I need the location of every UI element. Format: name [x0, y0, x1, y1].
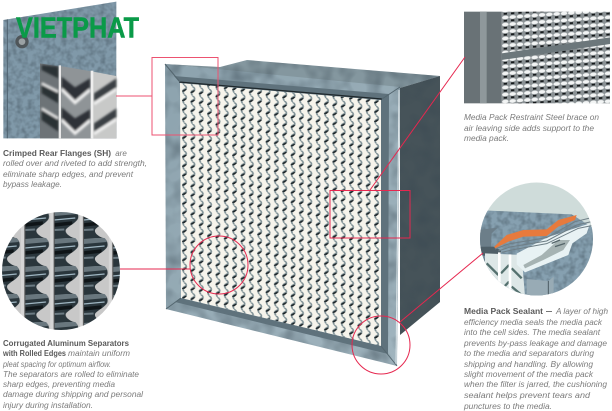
filter front frame: [165, 64, 400, 366]
filter illustration: [164, 60, 440, 366]
caption: corrugated aluminum separators: [2, 339, 143, 410]
caption: crimped rear flanges: [3, 149, 147, 189]
caption: media pack restraint: [464, 113, 600, 143]
caption: crimped rear flanges: are: [113, 149, 127, 158]
photo: crimped rear flanges: [3, 2, 116, 138]
lower bracket: [527, 277, 554, 297]
caption: media pack restraint: air leaving side adds support to the: [464, 124, 595, 133]
caption: media pack sealant: into the cell sides. The media sealant: [464, 328, 601, 337]
corrugated media detail: [40, 63, 116, 138]
circle background: [478, 180, 596, 298]
caption: corrugated aluminum separators: The separators are rolled to eliminate: [3, 370, 140, 379]
caption: crimped rear flanges: Crimped Rear Flanges (SH): [3, 149, 111, 158]
caption: crimped rear flanges: bypass leakage.: [3, 180, 62, 189]
caption: corrugated aluminum separators: with Rolled Edges: [2, 349, 66, 358]
caption: crimped rear flanges: rolled over and riveted to add strength,: [3, 159, 147, 168]
filter side face: [400, 76, 440, 335]
caption: media pack restraint: Media Pack Restraint Steel brace on: [464, 113, 600, 122]
callout: separator circle: [120, 236, 248, 294]
frame band: [464, 12, 502, 103]
caption: media pack sealant: sealant helps prevent tears and: [464, 391, 591, 400]
caption: corrugated aluminum separators: pleat spacing for optimum airflow.: [2, 360, 111, 369]
photo: media pack sealant: [480, 182, 593, 296]
housing metal: [475, 210, 597, 297]
media layers: [495, 218, 592, 252]
caption: media pack sealant: to the media and separators during: [464, 349, 595, 358]
callout: restraint box: [330, 57, 465, 238]
caption: media pack sealant: efficiency media seals the media pack: [464, 318, 603, 327]
filter top face: [164, 60, 440, 88]
callout: rear flange box: [116, 58, 218, 135]
caption: media pack sealant: when the filter is jarred, the cushioning: [464, 380, 608, 389]
caption: media pack restraint: media pack.: [464, 134, 509, 143]
caption: media pack sealant: prevents by-pass leakage and damage: [463, 339, 608, 348]
caption: corrugated aluminum separators: maintain uniform: [68, 349, 130, 358]
steel brace: [502, 37, 610, 60]
photo: media pack restraint brace: [464, 12, 610, 103]
left channel: [480, 228, 497, 246]
caption: media pack sealant: —: [546, 307, 552, 316]
torn media layer: [523, 240, 570, 268]
callouts: red highlight boxes, circles and leader lines: [116, 57, 483, 374]
caption: media pack sealant: A layer of high: [555, 307, 609, 316]
mesh media: [502, 12, 610, 103]
caption: media pack sealant: [463, 307, 609, 411]
rivet: [15, 35, 29, 48]
frame inner edge: [174, 76, 389, 354]
orange sealant: [494, 215, 577, 248]
callout: sealant circle: [352, 253, 483, 374]
white media sheet: [517, 223, 590, 272]
separators: [485, 253, 525, 297]
caption: media pack sealant: shipping and handling. By allowing: [464, 360, 594, 369]
caption: media pack sealant: Media Pack Sealant: [464, 307, 543, 316]
caption: corrugated aluminum separators: damage during shipping and personal: [3, 390, 143, 399]
flange metal: [3, 2, 116, 138]
caption: corrugated aluminum separators: sharp edges, preventing media: [3, 380, 116, 389]
photo: corrugated aluminum separators: [0, 210, 124, 332]
caption: corrugated aluminum separators: Corrugated Aluminum Separators: [3, 339, 130, 348]
caption: crimped rear flanges: eliminate sharp edges, and prevent: [3, 170, 134, 179]
caption: corrugated aluminum separators: injury during installation.: [3, 401, 93, 410]
media pack: [180, 83, 381, 346]
logo: VIETPHAT: VIETPHAT: [16, 12, 139, 44]
caption: media pack sealant: slight movement of the media pack: [464, 370, 594, 379]
caption: media pack sealant: punctures to the media.: [463, 402, 552, 411]
